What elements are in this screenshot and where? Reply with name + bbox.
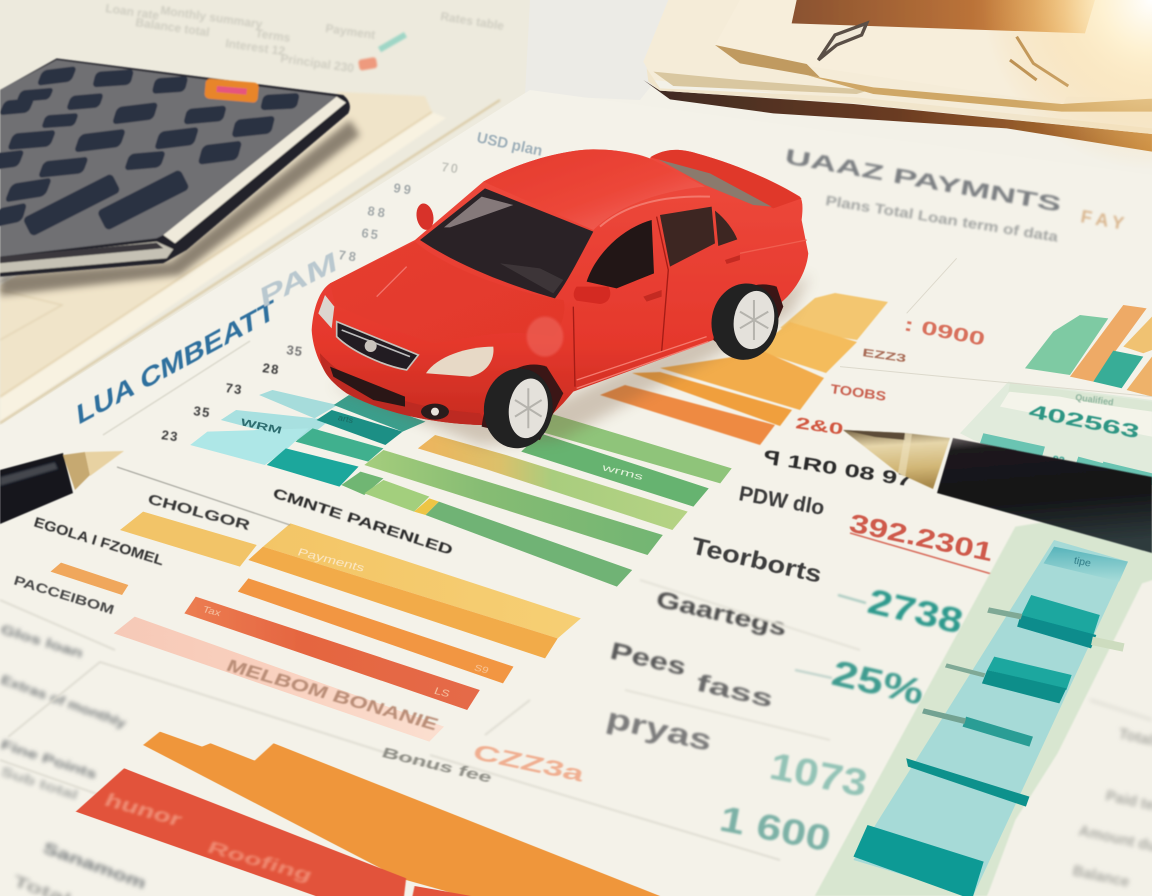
left number column: 35: [286, 342, 304, 359]
windshield: [420, 188, 593, 298]
lower left bar chart: Payments: [296, 546, 367, 574]
right chart text labels: : 0900: [902, 314, 987, 351]
lower bar chart: Roofing: [204, 838, 316, 885]
right chart text labels: 83: [1052, 454, 1065, 468]
icon: calculator: [0, 58, 350, 277]
payment table text: Teorborts: [689, 533, 824, 589]
left number column: 23: [161, 427, 180, 444]
left number column: 73: [225, 380, 244, 397]
rear spoiler: [650, 150, 802, 208]
background document: blurred figures at top: Terms: [255, 26, 292, 45]
heading: loan payments pay: FAY: [1079, 206, 1130, 234]
car shadow: [330, 275, 810, 445]
right chart text labels: 2&0: [794, 415, 844, 439]
heading: loan payment vertical title: PAM: [258, 245, 339, 314]
orange bar chart behind car: [600, 293, 888, 445]
left number column: 35: [193, 403, 212, 420]
left number column: 88: [367, 203, 389, 221]
scene: car loan infographic on a desk: fass: [694, 670, 776, 713]
lower left labels: CHOLGOR: [146, 490, 252, 533]
heading: loan payment vertical title: [75, 245, 339, 435]
mirrors: [574, 287, 610, 304]
left number column: 65: [361, 225, 381, 243]
lower bar chart: [76, 732, 660, 896]
far right margin text: Balance: [1071, 862, 1131, 891]
lower bar chart: Bonus fee: [380, 744, 494, 786]
scene: car loan infographic on a desk: 25%: [828, 652, 928, 713]
heading: loan payments pay: UAAZ PAYMNTS: [783, 145, 1063, 217]
scene: car loan infographic on a desk: Extras of monthly: [0, 672, 129, 731]
front wheel: [482, 365, 563, 440]
left number column: 28: [262, 360, 281, 377]
teal and green bar chart: [190, 390, 732, 587]
scene: car loan infographic on a desk: Fine Points: [0, 737, 99, 782]
lower bar chart: CZZ3a: [470, 740, 588, 787]
grille: [337, 322, 418, 370]
lower bumper shade: [320, 353, 487, 425]
scene: car loan infographic on a desk: 1 600: [716, 798, 834, 859]
lower left labels: CMNTE PARENLED: [271, 485, 455, 558]
right chart text labels: Qualified: [1075, 392, 1114, 407]
heading: loan payment vertical title: LUA CMBEATT: [75, 293, 277, 431]
lower left bar chart: [51, 512, 581, 742]
scene: car loan infographic on a desk: pryas: [603, 703, 715, 758]
scene: car loan infographic on a desk: Sub total: [0, 764, 80, 803]
hood: [330, 242, 565, 343]
left number column: [161, 129, 544, 444]
scene: car loan infographic on a desk: Gaartegs: [654, 586, 789, 641]
payment table text: ꟼ 1R0 08 97: [762, 447, 914, 490]
teal and green bar chart: WRM: [239, 417, 283, 437]
icon: right pen: [843, 430, 1152, 553]
lower air dam: [330, 367, 405, 407]
background document: blurred figures at top: Interest 12: [225, 36, 286, 58]
lower left bar chart: LS: [432, 686, 452, 700]
right chart text labels: EZZ3: [862, 347, 907, 365]
icon: left pen: [0, 451, 124, 524]
vertical teal bar chart: tipe: [1073, 556, 1092, 570]
background document: blurred figures at top: Principal 230: [280, 51, 355, 75]
scene: car loan infographic on a desk: Glos loan: [0, 622, 85, 661]
left number column: 78: [338, 247, 360, 265]
left number column: USD plan: [475, 129, 544, 160]
right chart text labels: TOOBS: [830, 381, 888, 404]
far right margin text: [1071, 700, 1152, 891]
lower left labels: [12, 467, 455, 617]
icon: red toy car: [312, 149, 808, 453]
background document: blurred figures at top: Balance total: [135, 15, 211, 39]
payment table text: PDW dlo: [737, 482, 826, 520]
teal and green bar chart: wrms: [599, 462, 644, 483]
lower left bar chart: MELBOM BONANIE: [223, 656, 441, 735]
lower bar chart: hunor: [101, 789, 185, 831]
sunlight glow at top right corner: [960, 0, 1152, 180]
background document: blurred figures at top: Payment: [325, 21, 376, 42]
notebook stack at top right: [643, 0, 1152, 152]
lower left bar chart: Tax: [201, 604, 223, 619]
lower left labels: PACCEIBOM: [12, 573, 116, 617]
scene: car loan infographic on a desk: Sanamom: [41, 840, 148, 893]
right mini chart panel: [840, 258, 1152, 493]
front door window: [587, 220, 654, 288]
fender highlight: [527, 317, 563, 357]
left number column: 99: [393, 180, 415, 198]
scene: car loan infographic on a desk: Pees: [608, 638, 689, 681]
folder under calculator: [0, 92, 500, 423]
door lines: [573, 217, 668, 387]
payment table text: [689, 447, 996, 589]
roof: [483, 149, 705, 230]
rear door window: [660, 207, 715, 267]
background document: blurred figures at top: Rates table: [440, 9, 505, 33]
teal and green bar chart: arts: [337, 413, 354, 425]
lower left bar chart: S9: [472, 662, 490, 676]
rear window: [658, 159, 772, 207]
payment table text: 392.2301: [847, 508, 996, 567]
scene: car loan infographic on a desk: 2738: [864, 582, 967, 641]
heading: loan payments pay: Plans Total Loan term of data: [825, 192, 1059, 245]
rear quarter window: [715, 211, 737, 246]
left number column: 70: [441, 159, 461, 177]
headlights: [426, 347, 494, 377]
background document: blurred figures at top: Loan rate: [105, 1, 160, 23]
right chart text labels: [794, 314, 1141, 468]
background document: blurred figures at top: [105, 1, 505, 75]
vertical teal bar chart: [815, 520, 1152, 896]
background document: blurred figures at top: Monthly summary: [160, 3, 264, 31]
right chart text labels: 402563: [1027, 401, 1141, 443]
lower left labels: EGOLA I FZOMEL: [32, 514, 166, 568]
fog lamp: [421, 404, 449, 420]
rear wheel: [713, 284, 783, 357]
heading: loan payments pay: [783, 145, 1130, 245]
scene: car loan infographic on a desk: 1073: [766, 746, 870, 806]
